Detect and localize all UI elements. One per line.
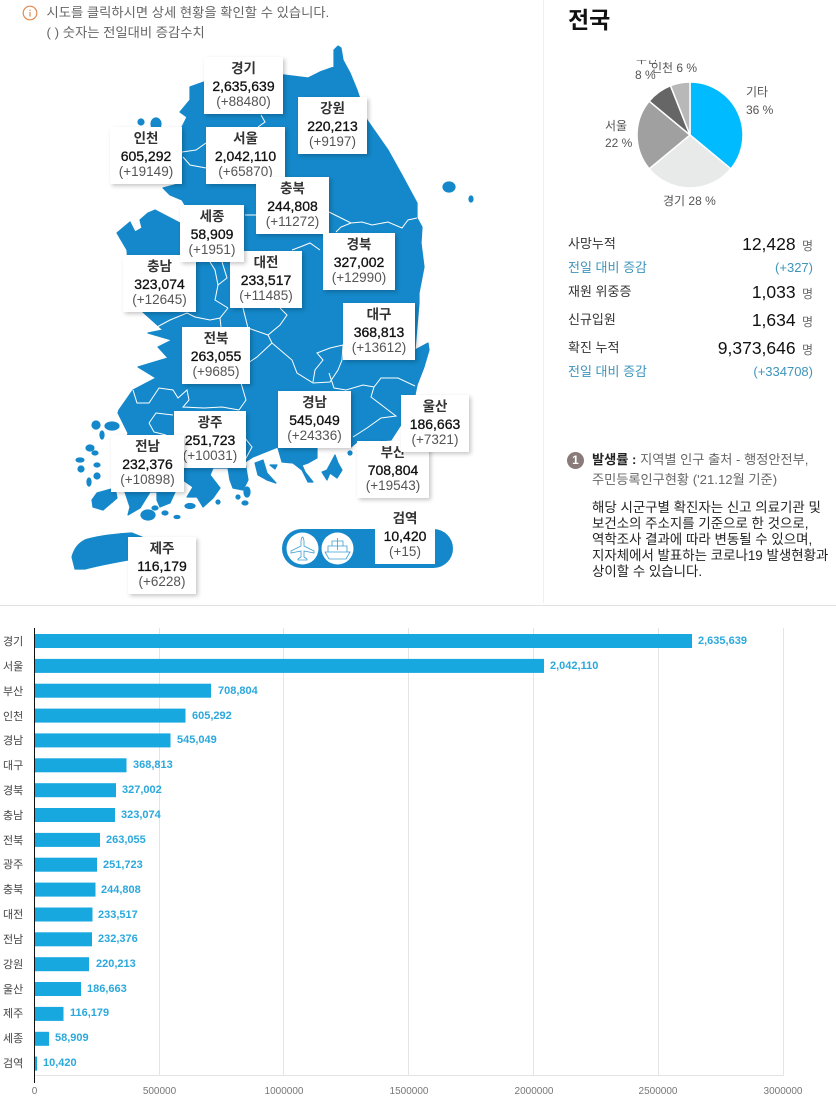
label: 서울 xyxy=(206,127,285,184)
bar chart: confirmed cases by region: 대전 xyxy=(3,908,23,921)
label: 경기: (+88480) xyxy=(216,94,271,109)
label: 광주 xyxy=(174,411,246,468)
footnote marker xyxy=(567,452,584,469)
bar chart: confirmed cases by region: 경남 xyxy=(3,734,23,747)
bar chart: confirmed cases by region: 233,517 xyxy=(98,909,138,921)
label: 경남 xyxy=(278,391,351,448)
pie chart: regional share: 서울 xyxy=(605,119,627,133)
label: 대전: (+11485) xyxy=(239,288,293,303)
stat: confirmed change: (+334708) xyxy=(753,364,813,379)
label: 전남 xyxy=(111,435,184,492)
label: 인천: 605,292 xyxy=(121,148,171,164)
bar chart: confirmed cases by region: 부산 xyxy=(3,685,23,698)
label: 충북: (+11272) xyxy=(266,214,319,229)
label: 울산 xyxy=(401,395,469,452)
footnote: disclaimer: 역학조사 결과에 따라 변동될 수 있으며, xyxy=(592,532,812,547)
pie chart: regional share: 경기 28 % xyxy=(663,194,716,208)
bar chart: confirmed cases by region: 2,042,110 xyxy=(550,660,598,672)
heading: nationwide: 전국 xyxy=(568,7,610,33)
stat: deaths total: 사망누적 xyxy=(568,236,616,251)
bar chart: confirmed cases by region: 제주 xyxy=(3,1007,23,1020)
quarantine pill with airport and harbor icons xyxy=(282,529,453,568)
label: 세종 xyxy=(180,205,244,262)
label: 광주: 광주 xyxy=(198,415,222,430)
bar chart: confirmed cases by region: 708,804 xyxy=(218,685,259,697)
bar chart: confirmed cases by region: 서울 xyxy=(3,660,23,673)
label: 경남: 경남 xyxy=(302,395,327,410)
label: 경북: 327,002 xyxy=(334,254,384,270)
stat: new admissions: 신규입원 xyxy=(568,312,616,327)
bar chart: confirmed cases by region: 327,002 xyxy=(122,784,162,796)
label: 부산 xyxy=(357,441,429,498)
label: 세종: 세종 xyxy=(200,209,224,224)
stat: deaths total: 12,428 명 xyxy=(742,234,813,254)
bar chart: confirmed cases by region: 186,663 xyxy=(87,983,127,995)
label: 충남: (+12645) xyxy=(132,292,187,307)
bar chart: confirmed cases by region: 545,049 xyxy=(177,734,217,746)
bar chart: confirmed cases by region: 대구 xyxy=(3,759,23,772)
label: 검역: (+15) xyxy=(389,544,421,559)
label: 광주: (+10031) xyxy=(183,448,237,463)
bar chart: confirmed cases by region: 232,376 xyxy=(98,933,138,945)
label: 서울: (+65870) xyxy=(218,164,273,179)
footnote: incidence source xyxy=(592,452,808,487)
label: 서울: 서울 xyxy=(233,131,258,146)
bar chart: confirmed cases by region: 전북 xyxy=(3,834,23,847)
stat: confirmed total: 9,373,646 명 xyxy=(718,338,813,358)
stat: deaths change xyxy=(568,260,813,275)
label: 부산: 708,804 xyxy=(368,462,418,478)
label: 경기: 경기 xyxy=(231,61,256,76)
label: 전남: 232,376 xyxy=(122,456,173,472)
notice: click instruction: 시도를 클릭하시면 상세 현황을 확인할 수 있습니다. xyxy=(46,5,329,20)
label: 강원: 강원 xyxy=(320,101,345,116)
bar chart: confirmed cases by region: 1500000 xyxy=(390,1086,429,1097)
label: 광주: 251,723 xyxy=(185,432,235,448)
label: 경북 xyxy=(323,233,395,290)
label: 인천: 인천 xyxy=(134,131,158,146)
label: 대구: 대구 xyxy=(367,307,391,322)
bar chart: confirmed cases by region: 0 xyxy=(32,1086,38,1097)
pie chart: regional share: 기타 xyxy=(746,85,768,99)
pie chart: regional share: 22 % xyxy=(605,136,633,150)
label: 인천: (+19149) xyxy=(119,164,173,179)
islands: south coast xyxy=(76,118,473,520)
label: 경남: (+24336) xyxy=(287,428,342,443)
stat: critical: 재원 위중증 xyxy=(568,284,631,299)
bar chart: confirmed cases by region: 220,213 xyxy=(96,958,136,970)
icon: airplane xyxy=(286,532,318,564)
bar chart: confirmed cases by region: 강원 xyxy=(3,958,23,971)
stat: critical: 1,033 명 xyxy=(752,282,813,302)
label: 세종: (+1951) xyxy=(189,242,235,257)
label: 울산: 186,663 xyxy=(410,416,460,432)
label: 경기 xyxy=(204,57,283,114)
label: 경북: (+12990) xyxy=(332,270,386,285)
label: 전북 xyxy=(182,327,250,384)
stat: new admissions: 1,634 명 xyxy=(752,310,813,330)
bar chart: confirmed cases by region: 251,723 xyxy=(103,859,143,871)
bar chart: confirmed cases by region: 263,055 xyxy=(106,834,146,846)
label: 검역: 10,420 xyxy=(384,528,426,544)
footnote: disclaimer: 지자체에서 발표하는 코로나19 발생현황과 xyxy=(592,548,828,563)
bar chart: confirmed cases by region: 605,292 xyxy=(192,710,232,722)
label: 충북: 충북 xyxy=(280,181,305,196)
bar chart: confirmed cases by region: 3000000 xyxy=(764,1086,803,1097)
bar chart: confirmed cases by region: 충북 xyxy=(3,883,23,896)
notice: click instruction: ( ) 숫자는 전일대비 증감수치 xyxy=(46,25,205,40)
label: 제주 xyxy=(128,537,196,594)
bar chart: confirmed cases by region: 광주 xyxy=(3,858,23,871)
label: 검역 xyxy=(375,507,435,564)
bar chart: confirmed cases by region: 1000000 xyxy=(265,1086,304,1097)
footnote: incidence source: 주민등록인구현황 ('21.12월 기준) xyxy=(592,472,777,487)
footnote: disclaimer: 해당 시군구별 확진자는 신고 의료기관 및 xyxy=(592,500,821,515)
label: 전남: 전남 xyxy=(135,439,160,454)
label: 제주: 제주 xyxy=(150,541,174,556)
label: 충북: 244,808 xyxy=(267,198,318,214)
label: 경기: 2,635,639 xyxy=(212,78,275,94)
notice: click instruction xyxy=(22,5,329,40)
label: 대전 xyxy=(230,251,302,308)
bar chart: confirmed cases by region: 경북 xyxy=(3,784,23,797)
bar chart: confirmed cases by region: 경기 xyxy=(3,635,23,648)
bar chart: confirmed cases by region: 323,074 xyxy=(121,809,162,821)
stat: confirmed total xyxy=(568,338,813,358)
bar chart: confirmed cases by region: 2000000 xyxy=(515,1086,554,1097)
bar chart: confirmed cases by region: 244,808 xyxy=(101,884,141,896)
label: 부산: 부산 xyxy=(381,445,405,460)
footnote: disclaimer: 보건소의 주소지를 기준으로 한 것으로, xyxy=(592,516,808,531)
stat: confirmed total: 확진 누적 xyxy=(568,340,619,355)
label: 대전: 대전 xyxy=(254,255,278,270)
icon: ship xyxy=(322,532,354,564)
stat: new admissions xyxy=(568,310,813,330)
label: 경남: 545,049 xyxy=(289,412,340,428)
bar chart: confirmed cases by region: 500000 xyxy=(143,1086,177,1097)
footnote marker: 1 xyxy=(572,453,579,467)
bar chart: confirmed cases by region: 2500000 xyxy=(639,1086,678,1097)
label: 부산: (+19543) xyxy=(366,478,420,493)
label: 제주: 116,179 xyxy=(137,558,187,574)
footnote: disclaimer xyxy=(592,500,828,579)
label: 대구: 368,813 xyxy=(354,324,404,340)
label: 충남: 충남 xyxy=(147,259,172,274)
label: 강원: 220,213 xyxy=(307,118,358,134)
stat: confirmed change xyxy=(568,364,813,379)
pie chart: regional share xyxy=(605,52,774,208)
stat: deaths total xyxy=(568,234,813,254)
label: 경북: 경북 xyxy=(347,237,371,252)
label: 전북: 263,055 xyxy=(191,348,241,364)
bar chart: confirmed cases by region: 세종 xyxy=(3,1032,23,1045)
pie chart: regional share: 부산 xyxy=(636,52,658,66)
label: 제주: (+6228) xyxy=(139,574,185,589)
bar chart: confirmed cases by region: 충남 xyxy=(3,809,23,822)
label: 검역: 검역 xyxy=(393,511,417,526)
pie chart: regional share: 8 % xyxy=(635,68,656,82)
label: 강원: (+9197) xyxy=(309,134,356,149)
bar chart: confirmed cases by region: 58,909 xyxy=(55,1032,89,1044)
bar chart: confirmed cases by region: 10,420 xyxy=(43,1057,77,1069)
bar chart: confirmed cases by region xyxy=(3,628,803,1097)
island: Jeju xyxy=(72,533,142,569)
label: 전북: (+9685) xyxy=(193,364,239,379)
label: 충남 xyxy=(123,255,196,312)
footnote: incidence source: 발생률 : 지역별 인구 출처 - 행정안전부, xyxy=(592,452,808,467)
label: 울산: 울산 xyxy=(423,399,447,414)
pie chart: regional share: 인천 6 % xyxy=(651,60,697,75)
label: 전북: 전북 xyxy=(204,331,228,346)
label: 대구 xyxy=(343,303,415,360)
label: 대전: 233,517 xyxy=(241,272,291,288)
bar chart: confirmed cases by region: 368,813 xyxy=(133,759,173,771)
label: 서울: 2,042,110 xyxy=(215,148,276,164)
label: 충남: 323,074 xyxy=(134,276,185,292)
label: 강원 xyxy=(298,97,367,154)
stat: deaths change: 전일 대비 증감 xyxy=(568,260,647,275)
label: 울산: (+7321) xyxy=(412,432,458,447)
label: 충북 xyxy=(256,177,329,234)
footnote: disclaimer: 상이할 수 있습니다. xyxy=(592,564,702,579)
label: 세종: 58,909 xyxy=(191,226,233,242)
bar chart: confirmed cases by region: 116,179 xyxy=(70,1007,109,1019)
pie chart: regional share: 36 % xyxy=(746,103,774,117)
bar chart: confirmed cases by region: 검역 xyxy=(3,1057,23,1070)
map of South Korea xyxy=(71,45,474,570)
stat: critical xyxy=(568,282,813,302)
label: 전남: (+10898) xyxy=(120,472,175,487)
bar chart: confirmed cases by region: 전남 xyxy=(3,933,23,946)
stat: deaths change: (+327) xyxy=(775,260,813,275)
bar chart: confirmed cases by region: 울산 xyxy=(3,983,23,996)
bar chart: confirmed cases by region: 2,635,639 xyxy=(698,635,747,647)
stat: confirmed change: 전일 대비 증감 xyxy=(568,364,647,379)
label: 인천 xyxy=(110,127,182,184)
icon: info circle xyxy=(22,6,38,20)
bar chart: confirmed cases by region: 인천 xyxy=(3,709,23,723)
label: 대구: (+13612) xyxy=(352,340,406,355)
